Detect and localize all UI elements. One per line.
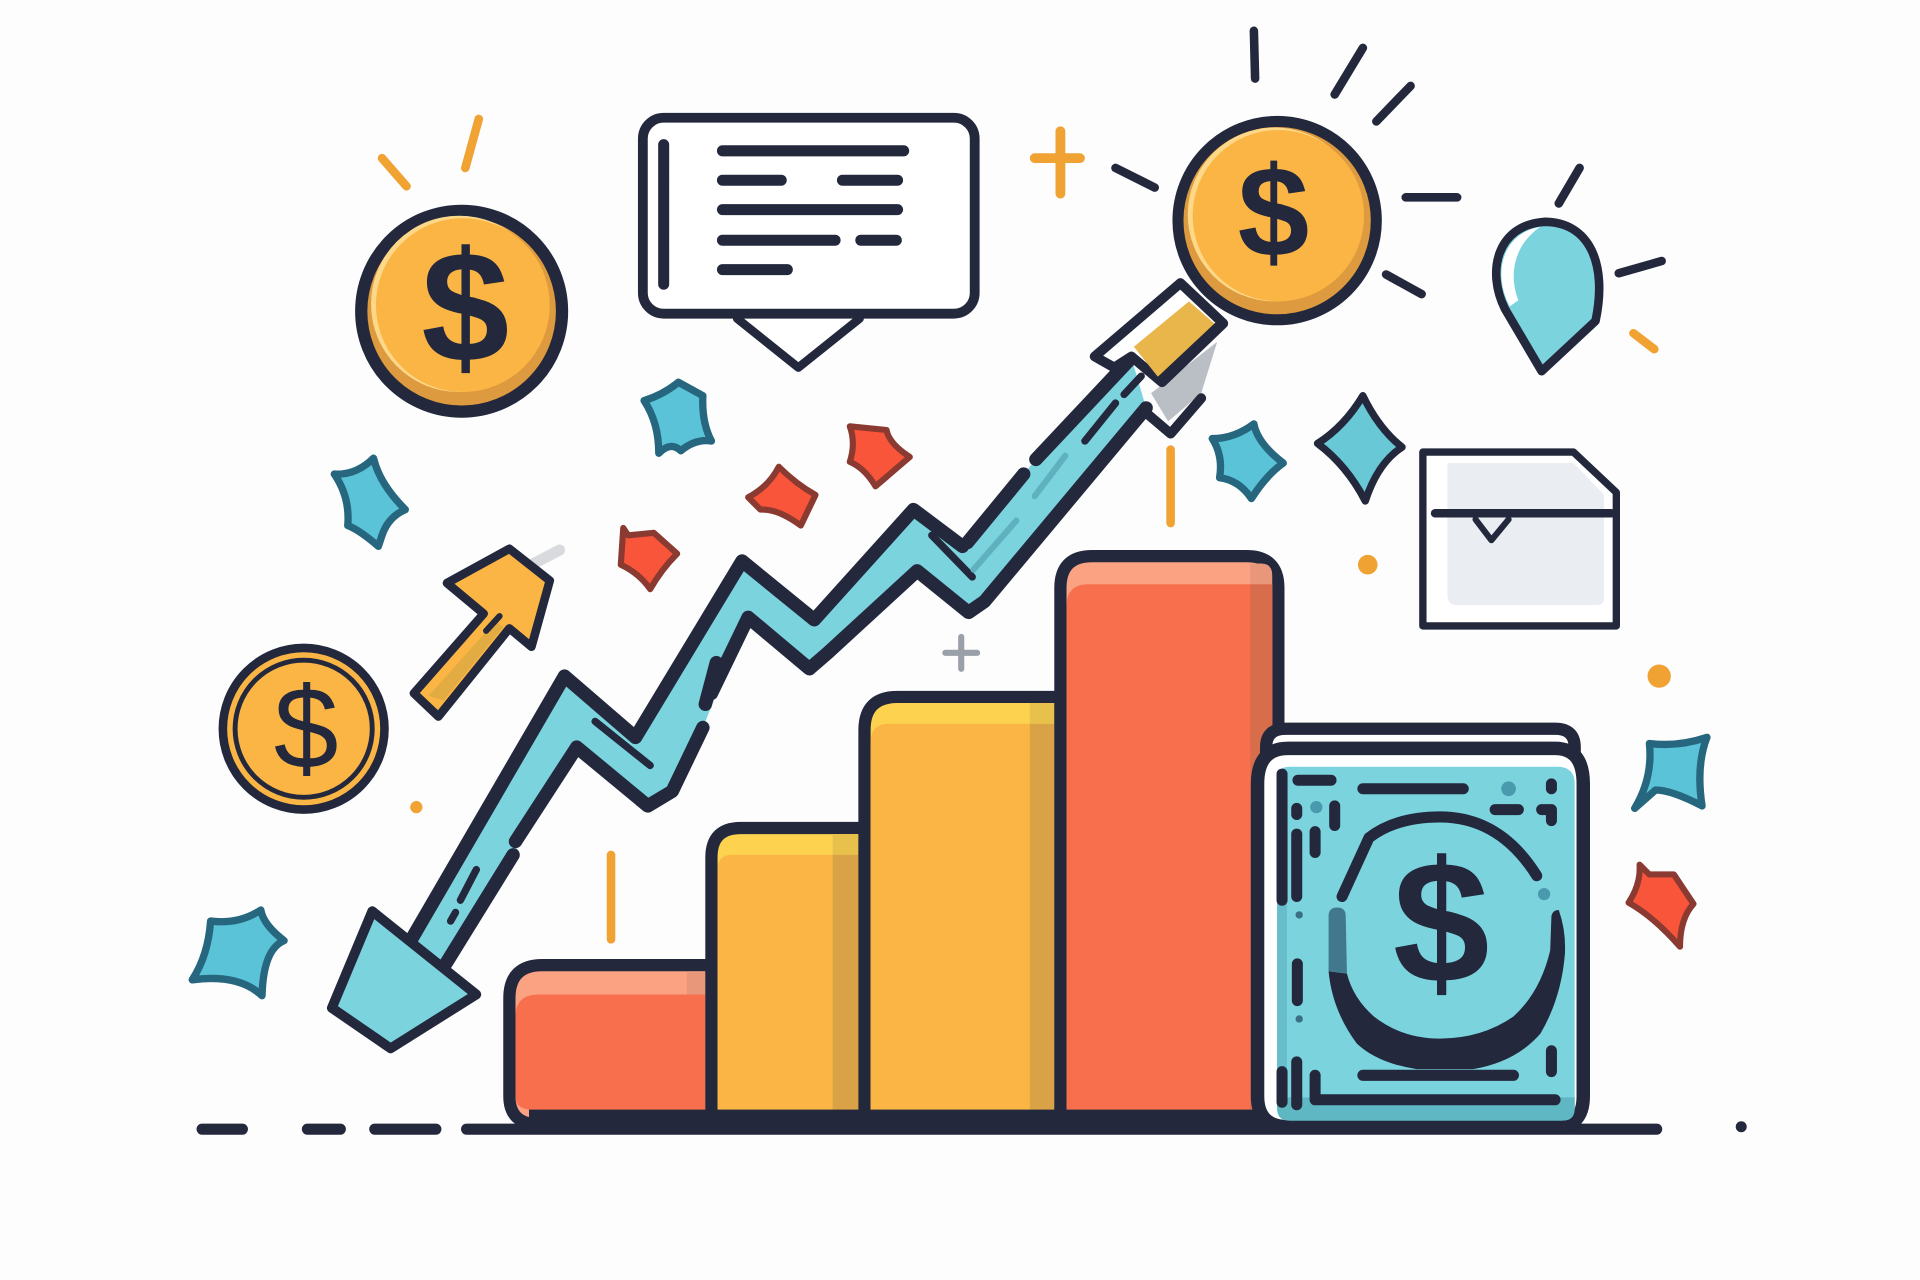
coin: left large — [361, 119, 562, 412]
note linework — [1282, 774, 1565, 1105]
plus signs — [945, 131, 1080, 669]
bar 1 red — [509, 965, 713, 1124]
bar chart — [509, 556, 1278, 1134]
coin: lower left: $ — [274, 663, 338, 793]
bar 2 yellow — [711, 828, 864, 1121]
speech bubble — [643, 118, 975, 368]
bar 4 red — [1060, 556, 1278, 1121]
dollar sign: banknote: $ — [1393, 825, 1490, 1019]
rising zigzag arrow — [332, 283, 1223, 1048]
rays — [1116, 31, 1457, 294]
coin: top centre with rays: $ — [1238, 141, 1309, 284]
coin: left large: $ — [421, 219, 509, 395]
red confetti — [621, 426, 1693, 947]
banknote stack — [1258, 729, 1583, 1127]
icon: location pin / light drop — [1496, 168, 1662, 371]
coin: lower left — [223, 648, 384, 810]
envelope / folder — [1423, 452, 1616, 626]
baseline — [202, 1121, 1747, 1132]
orange accents — [410, 333, 1671, 939]
bar 3 yellow — [864, 697, 1060, 1121]
small yellow arrow — [414, 549, 560, 717]
coin: top centre with rays — [1116, 31, 1457, 320]
pencil tip — [1095, 283, 1223, 434]
teal confetti — [192, 382, 1707, 996]
arrow tail — [332, 911, 476, 1048]
